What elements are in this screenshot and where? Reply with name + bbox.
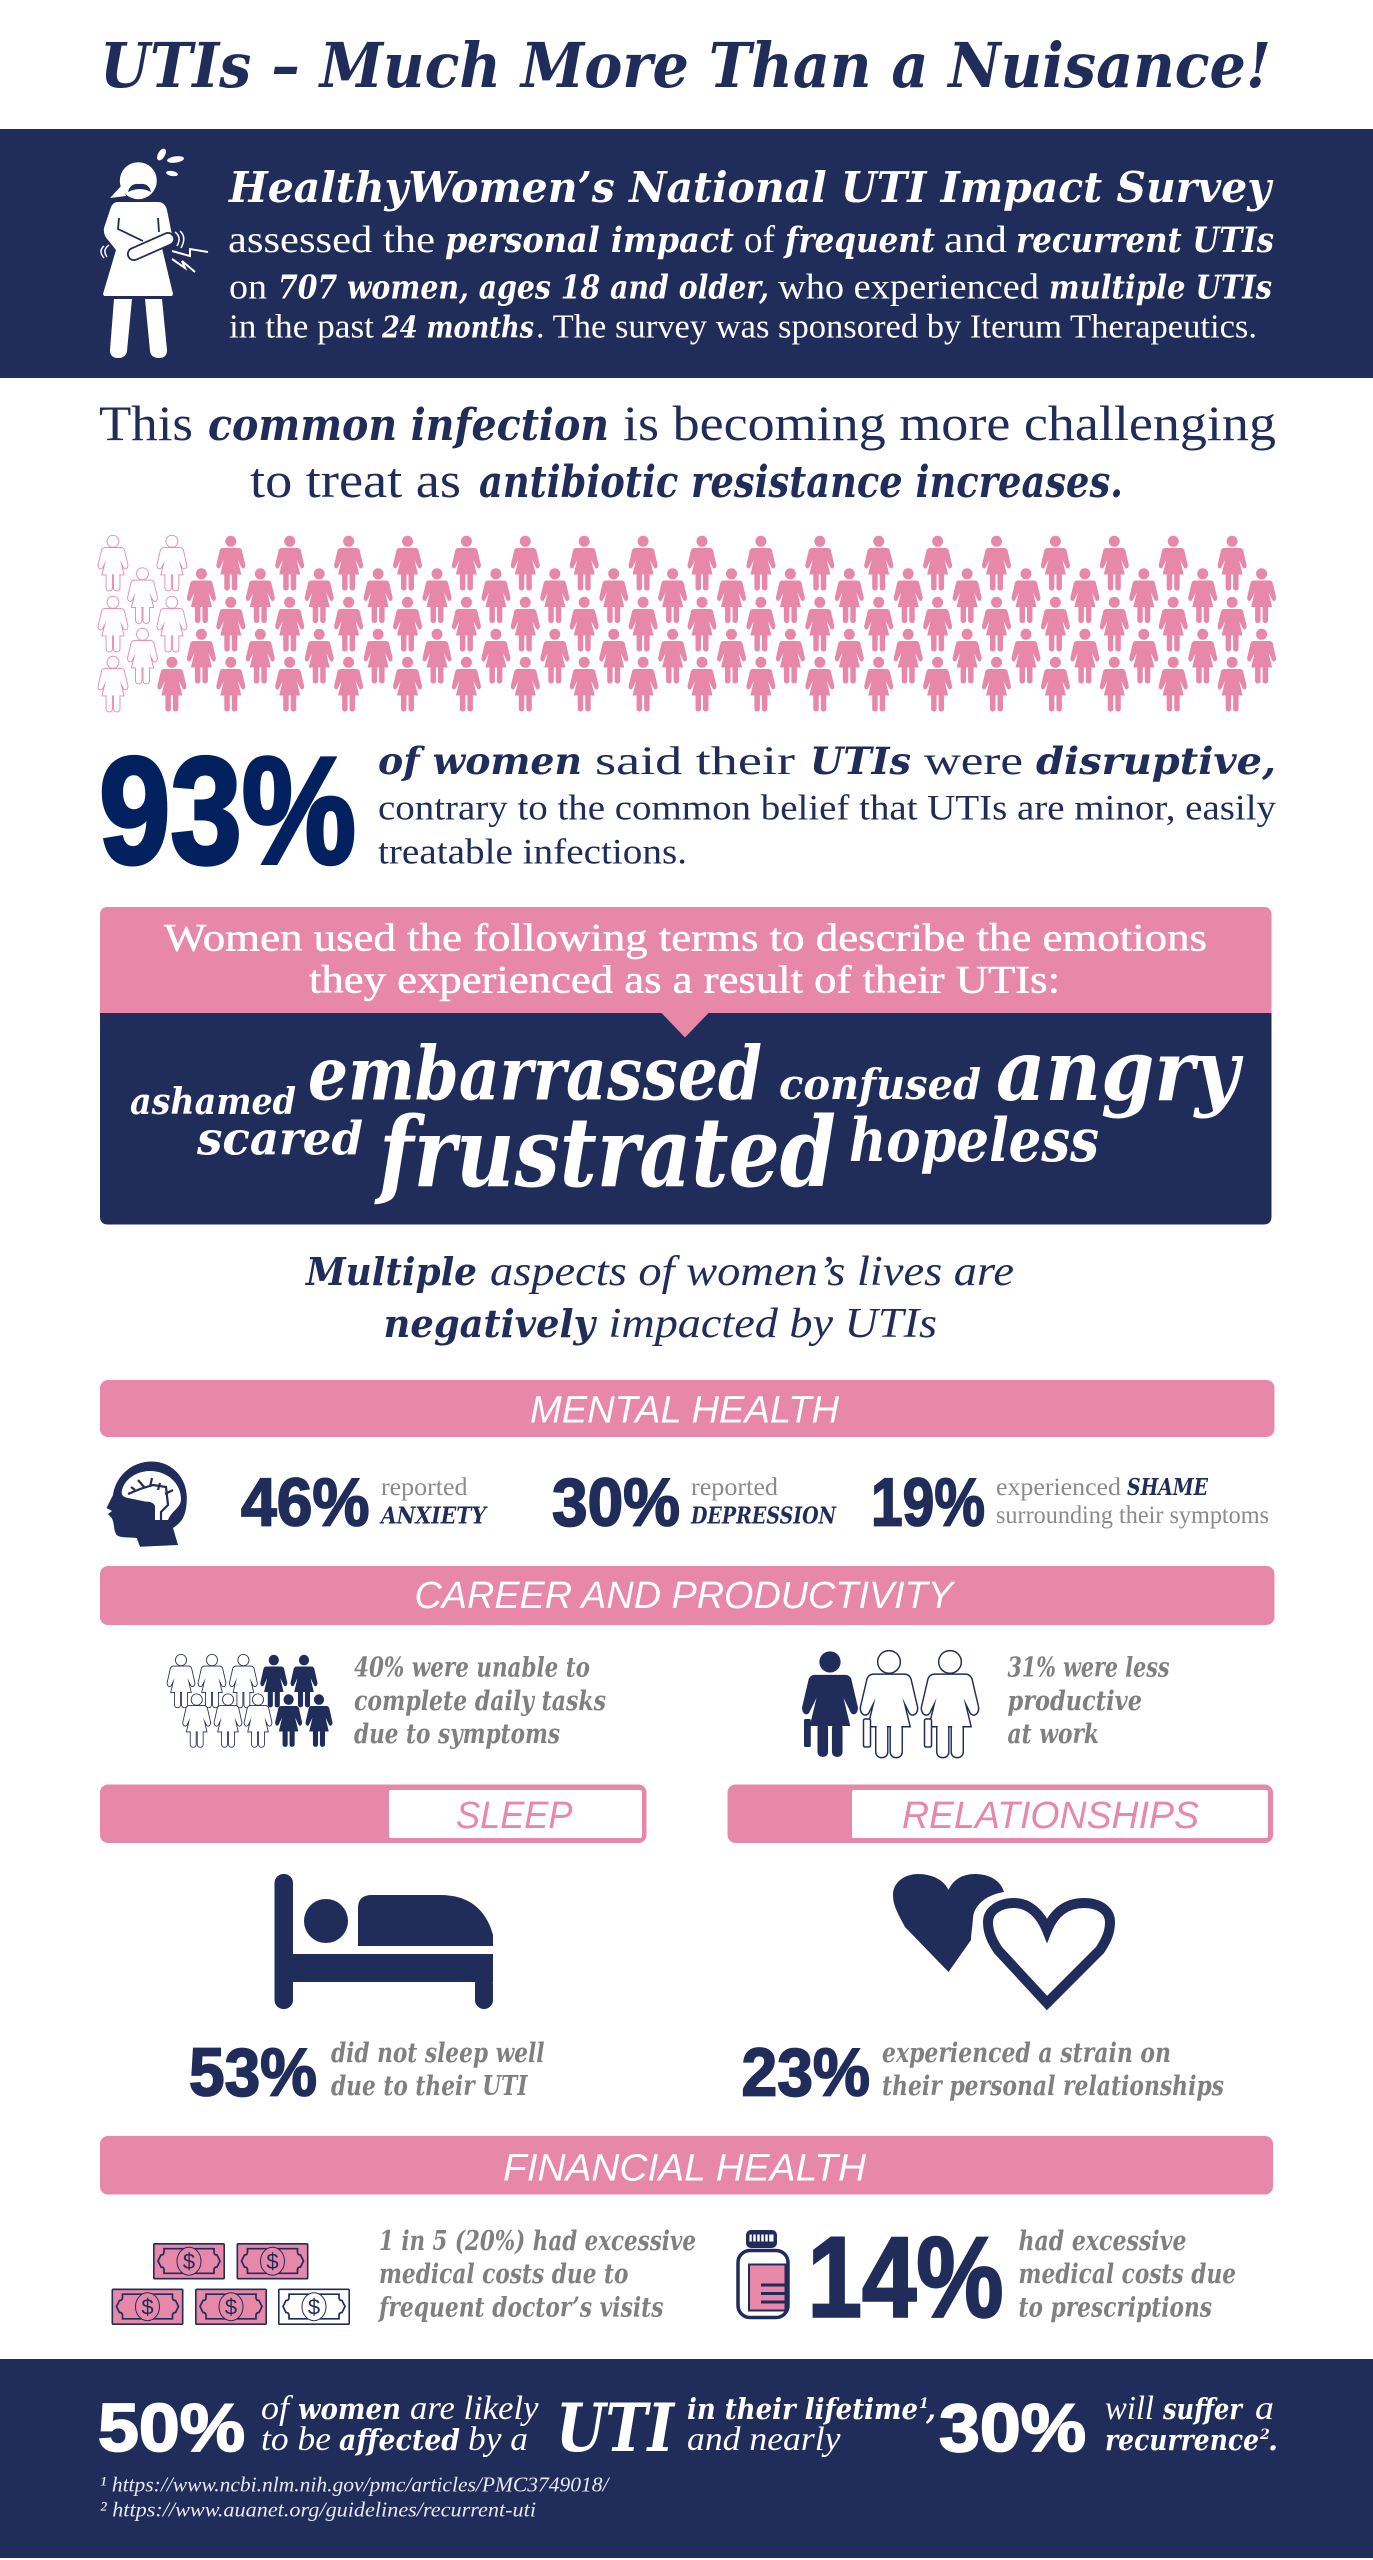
text: 93% description: said their <box>595 738 795 783</box>
text: 40% unable: due to symptoms <box>354 1719 560 1750</box>
banner: sleep <box>100 1784 646 1843</box>
stat: 93%: 93% <box>99 726 356 896</box>
stat: 19% shame: 19% <box>871 1464 985 1540</box>
text: 40% unable: complete daily tasks <box>354 1686 606 1717</box>
text: of women likely affected <box>261 2390 539 2458</box>
text: will suffer a recurrence: 2 <box>1259 2427 1270 2443</box>
footnotes: ² https://www.auanet.org/guidelines/recurrent-uti <box>100 2498 536 2522</box>
text: prescription costs: had excessive <box>1018 2226 1186 2257</box>
survey description: frequent <box>782 220 935 261</box>
text: 93% description: treatable infections. <box>378 832 687 872</box>
text: 31% productive: 31% were less <box>1008 1652 1170 1684</box>
statement: common infection: This <box>99 395 193 451</box>
banner: financial health: FINANCIAL HEALTH <box>503 2148 867 2190</box>
statement: common infection: common infection <box>208 400 609 451</box>
text: will suffer a recurrence: recurrence <box>1105 2423 1259 2457</box>
survey description: 24 months <box>381 310 534 346</box>
footnotes: ¹ https://www.ncbi.nlm.nih.gov/pmc/articles/PMC3749018/ <box>100 2472 611 2496</box>
text: in their lifetime: 1 <box>919 2396 929 2412</box>
text: in their lifetime: , <box>925 2392 936 2426</box>
text: 40% unable: 40% were unable to <box>354 1652 590 1684</box>
word cloud: angry <box>996 1021 1244 1120</box>
stat: 30% depression: reported <box>691 1474 779 1501</box>
stat: 30% depression: DEPRESSION <box>690 1502 837 1530</box>
statement: common infection <box>99 395 1276 508</box>
heading: multiple aspects: impacted by UTIs <box>608 1301 937 1347</box>
banner: mental health <box>100 1380 1274 1437</box>
stat: 14%: 14% <box>808 2214 1004 2342</box>
text: prescription costs: medical costs due <box>1018 2259 1236 2290</box>
banner: career and productivity: CAREER AND PRODUCTIVITY <box>414 1575 956 1617</box>
text: prescription costs: to prescriptions <box>1018 2292 1212 2324</box>
survey description: and <box>944 219 1007 261</box>
text: will suffer a recurrence <box>1105 2390 1278 2457</box>
statement: common infection: to treat as <box>250 452 461 508</box>
text: in their lifetime: and nearly <box>687 2421 841 2458</box>
banner: career and productivity <box>100 1566 1274 1625</box>
title: UTIs – Much More Than a Nuisance! <box>100 29 1271 102</box>
heading: multiple aspects: aspects of women’s lives are <box>490 1249 1014 1295</box>
word cloud <box>130 1021 1244 1209</box>
icon: woman in pain <box>101 147 208 358</box>
stat: 23% relationships: experienced a strain on <box>882 2038 1171 2069</box>
icon: two hearts <box>893 1874 1110 2003</box>
footnotes <box>100 2472 611 2522</box>
callout pointer <box>661 1012 709 1038</box>
icon: head with brain <box>106 1462 187 1547</box>
emotions intro text: they experienced as a result of their UTIs: <box>309 958 1060 1002</box>
text: of women likely affected: are likely <box>410 2390 539 2427</box>
survey heading: HealthyWomen’s National UTI Impact Survey <box>228 163 1274 212</box>
survey description <box>228 219 1274 346</box>
text: 93% description <box>378 738 1276 872</box>
survey description: assessed the <box>228 219 435 261</box>
heading: multiple aspects: negatively <box>384 1301 598 1346</box>
text: 93% description: were <box>924 738 1023 783</box>
heading: multiple aspects <box>304 1249 1014 1347</box>
icon: pill bottle <box>738 2230 788 2318</box>
stat: 46% anxiety: ANXIETY <box>379 1502 488 1530</box>
survey description: in the past <box>229 308 375 346</box>
text: 31% productive <box>1008 1652 1170 1750</box>
text: 31% productive: productive <box>1008 1686 1142 1717</box>
survey description: of <box>744 219 775 261</box>
pictogram: 31% less productive <box>802 1651 978 1757</box>
text: 1 in 5 medical costs: frequent doctor’s visits <box>377 2292 664 2324</box>
text: 1 in 5 medical costs <box>377 2226 696 2324</box>
survey description: 707 women, ages 18 and older, <box>278 268 769 306</box>
stat: 50%: 50% <box>98 2390 245 2466</box>
text: prescription costs <box>1018 2226 1236 2324</box>
text: 93% description: contrary to the common belief that UTIs are minor, easily <box>378 788 1276 828</box>
banner: sleep: SLEEP <box>456 1795 573 1837</box>
banner: mental health: MENTAL HEALTH <box>530 1390 840 1432</box>
stat: 23% relationships: their personal relationships <box>882 2071 1224 2102</box>
stat: 53% sleep: due to their UTI <box>331 2071 529 2102</box>
stat: 23% relationships <box>742 2034 1224 2110</box>
heading: multiple aspects: Multiple <box>304 1249 477 1294</box>
word cloud: hopeless <box>849 1106 1099 1176</box>
stat: 30% depression: 30% <box>552 1464 680 1540</box>
stat: 19% shame: SHAME <box>1127 1474 1208 1501</box>
text: 31% productive: at work <box>1008 1719 1099 1750</box>
word cloud: confused <box>779 1060 981 1109</box>
text: will suffer a recurrence: suffer <box>1162 2392 1244 2426</box>
text: 40% unable <box>354 1652 606 1750</box>
stat: 53% sleep: did not sleep well <box>331 2038 544 2069</box>
icon: dollar bills <box>112 2244 349 2324</box>
statement: common infection: antibiotic resistance increases. <box>479 457 1123 508</box>
stat: 19% shame <box>871 1464 1269 1540</box>
panel: survey intro band <box>0 129 1373 378</box>
word cloud: frustrated <box>374 1096 836 1209</box>
stat: 46% anxiety <box>241 1464 488 1540</box>
text: will suffer a recurrence: a <box>1255 2390 1274 2427</box>
survey description: recurrent UTIs <box>1016 220 1274 261</box>
stat: 23% relationships: 23% <box>742 2034 870 2110</box>
icon: bed <box>274 1874 493 2009</box>
text: 93% description: disruptive, <box>1036 739 1276 783</box>
survey description: on <box>229 266 267 306</box>
banner: relationships: RELATIONSHIPS <box>902 1795 1199 1837</box>
stat: 30% depression <box>552 1464 837 1540</box>
panel: footer band <box>0 2359 1373 2558</box>
text: UTI: UTI <box>556 2389 676 2467</box>
word cloud: ashamed <box>130 1081 296 1123</box>
stat: 53% sleep: 53% <box>189 2034 317 2110</box>
text: 93% description: of women <box>378 739 582 783</box>
text: of women likely affected: of <box>261 2390 294 2427</box>
text: 1 in 5 medical costs: medical costs due to <box>379 2259 628 2290</box>
stat: 46% anxiety: reported <box>381 1474 468 1501</box>
word cloud: embarrassed <box>308 1032 762 1118</box>
survey description: who experienced <box>778 266 1039 306</box>
emotions intro text <box>164 916 1207 1002</box>
panel: emotions <box>100 907 1272 1224</box>
emotions intro text: Women used the following terms to describe the emotions <box>164 916 1207 960</box>
pictogram: 40% of women <box>168 1655 332 1747</box>
stat: 53% sleep <box>189 2034 544 2110</box>
text: of women likely affected: women <box>298 2392 401 2426</box>
text: of women likely affected: to be <box>261 2421 331 2458</box>
stat: 46% anxiety: 46% <box>241 1464 370 1540</box>
statement: common infection: is becoming more challenging <box>623 395 1276 451</box>
text: 1 in 5 medical costs: 1 in 5 (20%) had excessive <box>379 2226 696 2257</box>
survey description: multiple UTIs <box>1049 268 1272 306</box>
text: 93% description: UTIs <box>810 739 911 783</box>
banner: relationships <box>728 1784 1273 1843</box>
text: will suffer a recurrence: will <box>1105 2390 1154 2427</box>
stat: 30%: 30% <box>939 2390 1086 2466</box>
banner: financial health <box>100 2136 1273 2194</box>
stat: 19% shame: surrounding their symptoms <box>996 1502 1269 1529</box>
text: in their lifetime: in their lifetime <box>687 2392 918 2426</box>
text: of women likely affected: by a <box>468 2421 528 2458</box>
text: will suffer a recurrence: . <box>1268 2423 1278 2457</box>
survey description: . The survey was sponsored by Iterum Therapeutics. <box>536 308 1257 346</box>
text: of women likely affected: affected <box>339 2423 460 2457</box>
word cloud: scared <box>196 1112 363 1166</box>
text: in their lifetime <box>687 2392 936 2458</box>
stat: 19% shame: experienced <box>996 1474 1122 1501</box>
pictogram: 93 of 100 women <box>98 536 1276 712</box>
survey description: personal impact <box>445 220 734 261</box>
